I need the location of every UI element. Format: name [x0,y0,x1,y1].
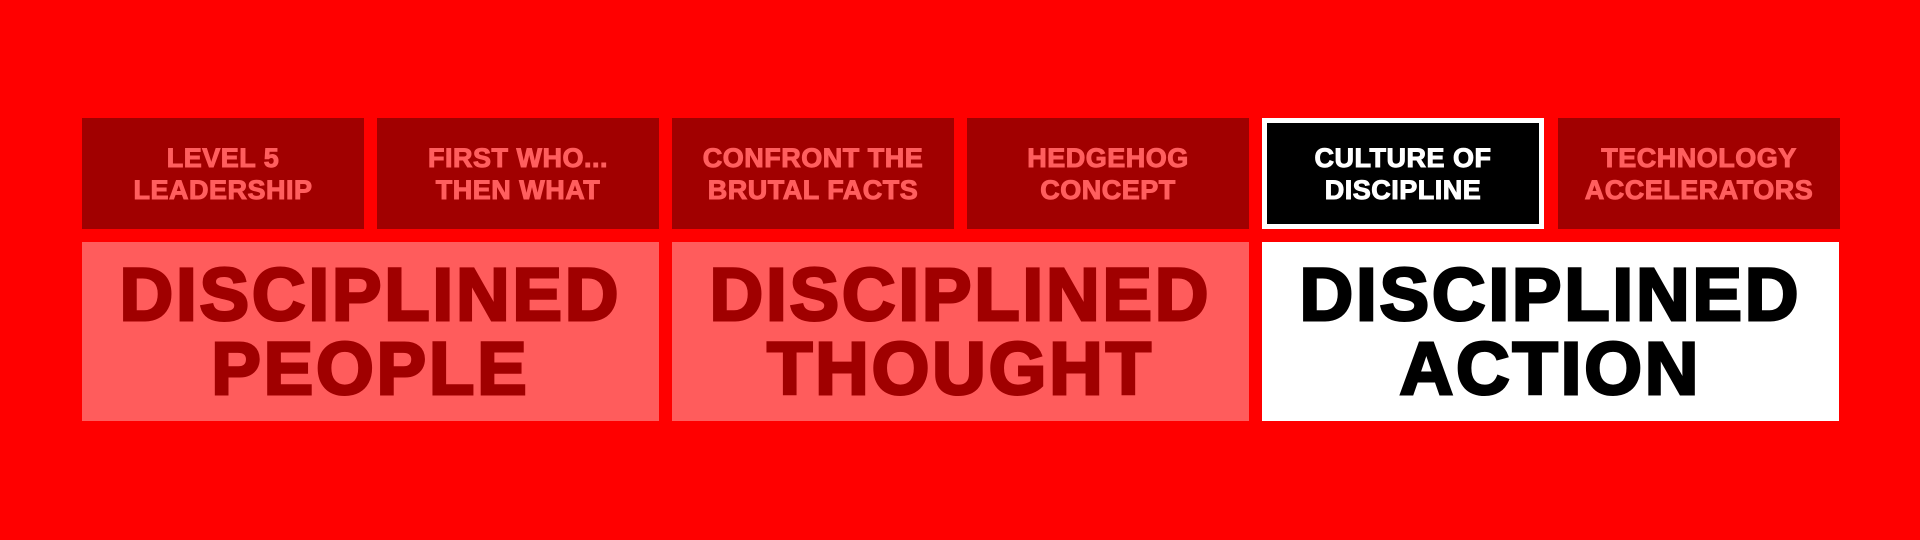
pillar: hedgehog concept: HEDGEHOG [1027,142,1189,172]
stage: disciplined thought [672,242,1249,421]
stage: disciplined thought: DISCIPLINED [710,252,1211,336]
stage: disciplined people: PEOPLE [211,326,530,410]
stage: disciplined people [82,242,659,421]
pillar: level 5 leadership: LEVEL 5 [167,142,279,172]
pillar: hedgehog concept [967,118,1249,229]
pillar: culture of discipline (highlighted): DISCIPLINE [1325,174,1481,204]
stage: disciplined action (highlighted) [1262,242,1839,421]
pillar: confront the brutal facts: BRUTAL FACTS [708,174,918,204]
pillar: technology accelerators [1558,118,1840,229]
pillar: first who then what: THEN WHAT [436,174,600,204]
stage: disciplined thought: THOUGHT [767,326,1154,410]
stage: disciplined action (highlighted): ACTION [1400,326,1701,410]
pillar: confront the brutal facts [672,118,954,229]
pillar: first who then what: FIRST WHO... [428,142,608,172]
pillar: culture of discipline (highlighted) [1262,118,1544,229]
pillar: level 5 leadership [82,118,364,229]
pillar: culture of discipline (highlighted): CULTURE OF [1314,142,1491,172]
pillar: technology accelerators: ACCELERATORS [1585,174,1813,204]
pillar: confront the brutal facts: CONFRONT THE [703,142,923,172]
stage: disciplined people: DISCIPLINED [120,252,621,336]
pillar: level 5 leadership: LEADERSHIP [133,174,313,204]
pillar: hedgehog concept: CONCEPT [1040,174,1176,204]
stage: disciplined action (highlighted): DISCIPLINED [1300,252,1801,336]
pillar: first who then what [377,118,659,229]
pillar: technology accelerators: TECHNOLOGY [1601,142,1797,172]
